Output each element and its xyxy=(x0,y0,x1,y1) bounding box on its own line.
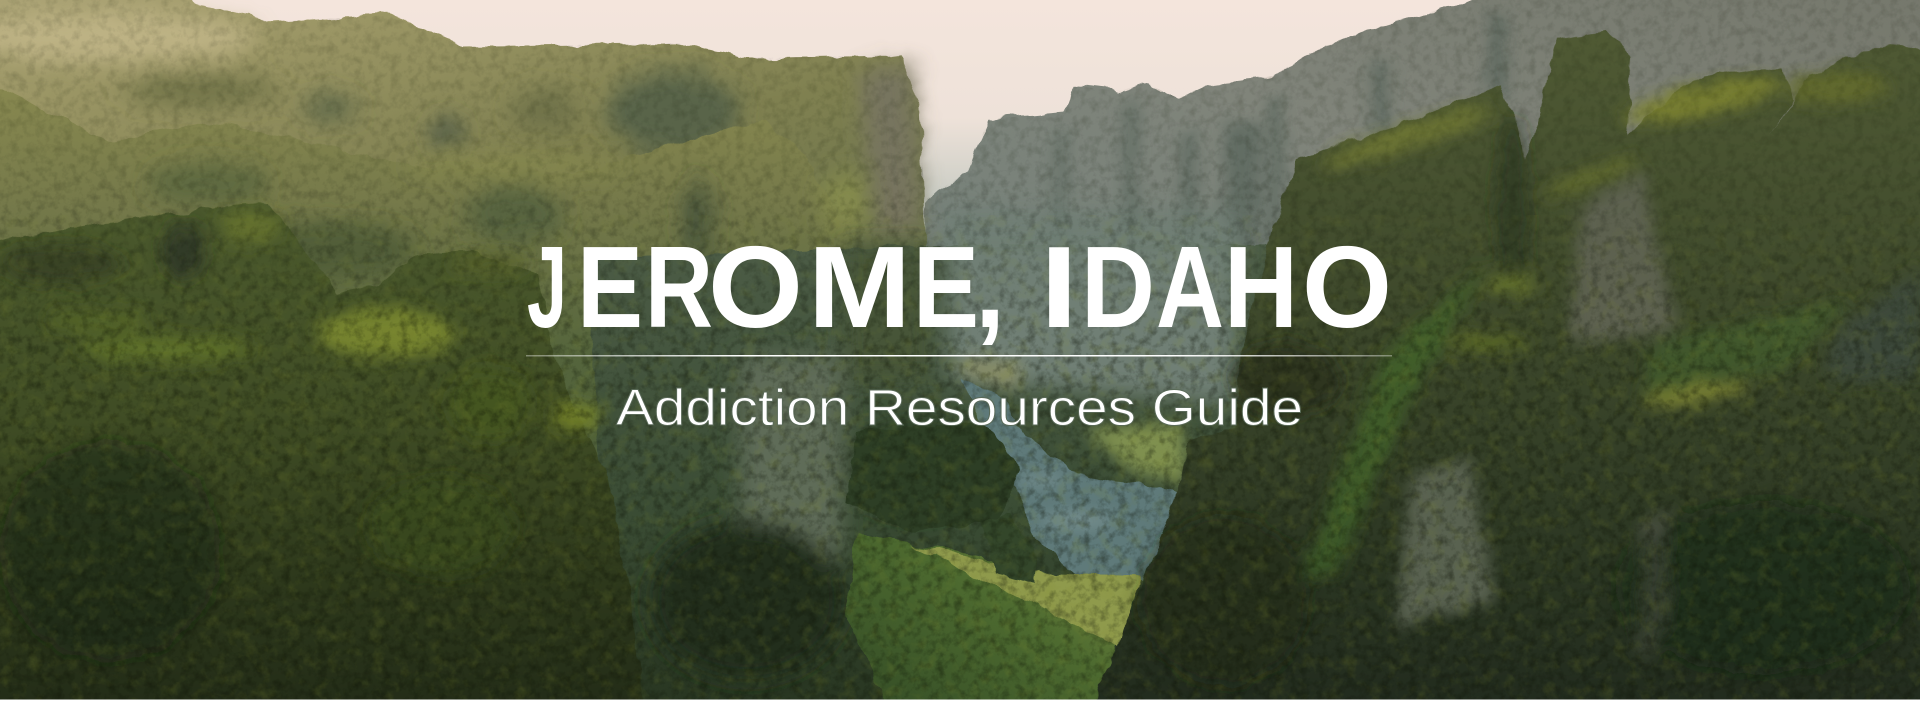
title: E xyxy=(577,222,643,352)
title: H xyxy=(1224,222,1298,352)
title: E xyxy=(913,222,979,352)
far right canyon wall xyxy=(924,0,1920,416)
title: R xyxy=(645,222,713,352)
sky xyxy=(0,0,1920,294)
title: , xyxy=(975,222,1005,352)
title: M xyxy=(808,222,911,352)
far left tan hillside xyxy=(0,0,940,404)
central valley xyxy=(588,233,1273,701)
foreground valley slope xyxy=(845,422,1141,701)
title: I xyxy=(1040,222,1078,352)
bottom edge xyxy=(0,700,1920,701)
title: D xyxy=(1081,222,1155,352)
title: O xyxy=(708,222,803,352)
left foreground mossy rock xyxy=(0,202,649,701)
river and grass banks xyxy=(961,358,1188,583)
right foreground mossy rocks xyxy=(1078,31,1920,701)
light moss mottling xyxy=(0,215,1920,701)
title: O xyxy=(1302,222,1392,352)
title: A xyxy=(1156,222,1224,352)
middle terrace of hillside xyxy=(0,73,955,701)
subtitle: Addiction Resources Guide xyxy=(616,379,1303,436)
title: J xyxy=(527,222,567,352)
divider line xyxy=(526,355,1392,356)
